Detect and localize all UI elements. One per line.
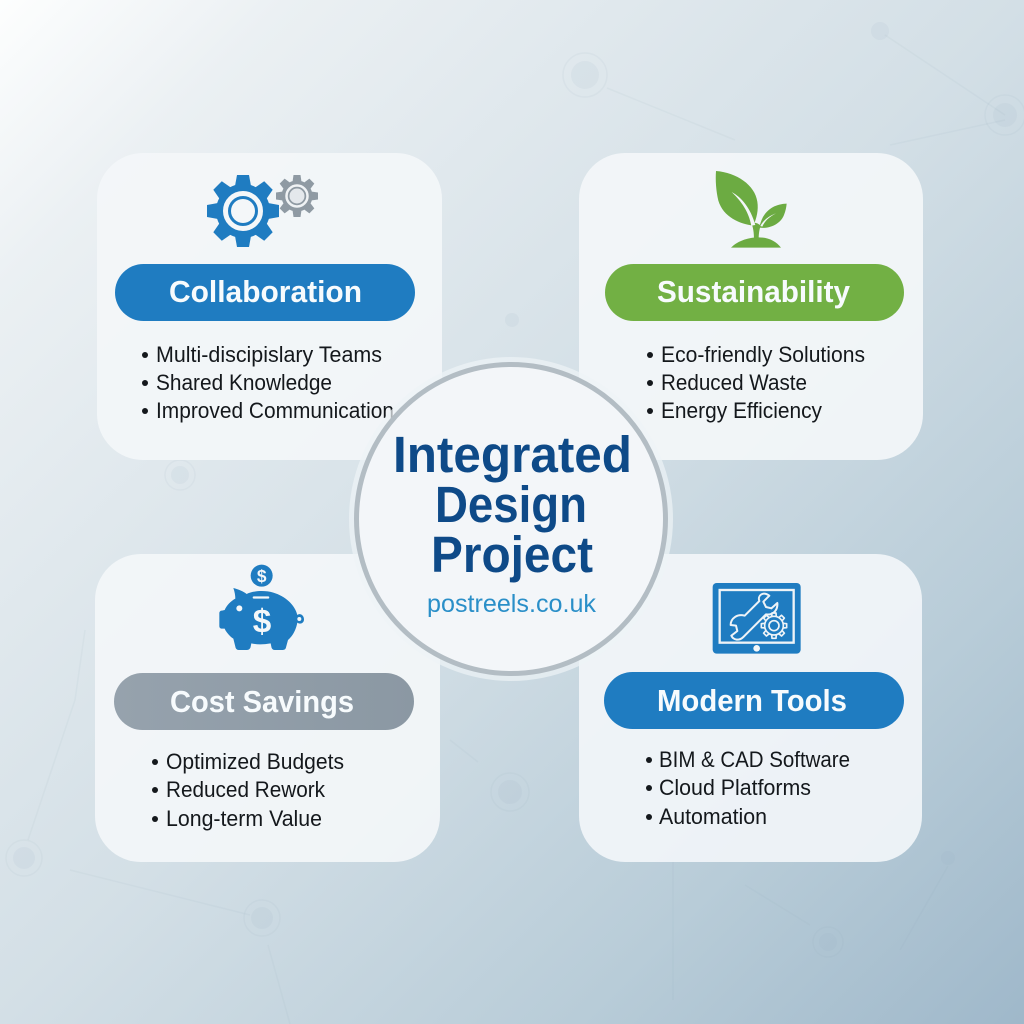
heading pill: Sustainability <box>605 264 904 321</box>
icon: piggy bank <box>219 565 304 650</box>
heading pill: Modern Tools: Modern Tools <box>657 683 847 718</box>
list: Collaboration: Shared Knowledge <box>156 370 332 395</box>
list: Collaboration <box>142 342 394 423</box>
icon: gears <box>207 175 318 247</box>
central hub <box>349 357 673 681</box>
heading pill: Collaboration <box>115 264 415 321</box>
list: Collaboration: Improved Communication <box>156 398 394 423</box>
list: Cost Savings: Reduced Rework <box>166 777 326 802</box>
list: Cost Savings: Long-term Value <box>166 806 322 831</box>
panel: Sustainability <box>579 153 923 460</box>
list: Sustainability <box>647 342 865 423</box>
icon: tablet with wrench and gear <box>713 583 801 654</box>
title: Design <box>435 476 587 533</box>
title <box>393 426 632 583</box>
list: Sustainability: Reduced Waste <box>661 370 807 395</box>
list: Collaboration: Multi-discipislary Teams <box>156 342 382 367</box>
list: Modern Tools: Cloud Platforms <box>659 775 811 800</box>
list: Modern Tools: BIM & CAD Software <box>659 747 850 772</box>
heading pill: Modern Tools <box>604 672 904 729</box>
heading pill: Cost Savings: Cost Savings <box>170 684 354 719</box>
heading pill: Sustainability: Sustainability <box>657 274 851 309</box>
heading pill: Collaboration: Collaboration <box>169 274 362 309</box>
list: Sustainability: Eco-friendly Solutions <box>661 342 865 367</box>
heading pill: Cost Savings <box>114 673 414 730</box>
panel: Modern Tools <box>579 554 922 862</box>
list: Sustainability: Energy Efficiency <box>661 398 822 423</box>
list: Modern Tools: Automation <box>659 804 767 829</box>
icon: sprout <box>716 171 787 248</box>
list: Modern Tools <box>646 747 850 829</box>
icon: piggy bank: $ <box>253 603 272 640</box>
title: Integrated <box>393 426 632 483</box>
list: Cost Savings: Optimized Budgets <box>166 749 344 774</box>
website: postreels.co.uk <box>427 590 597 618</box>
panel: Cost Savings <box>95 554 440 862</box>
list: Cost Savings <box>152 749 344 831</box>
title: Project <box>431 526 593 583</box>
icon: piggy bank: $ <box>257 566 267 586</box>
panel: Collaboration <box>97 153 442 460</box>
